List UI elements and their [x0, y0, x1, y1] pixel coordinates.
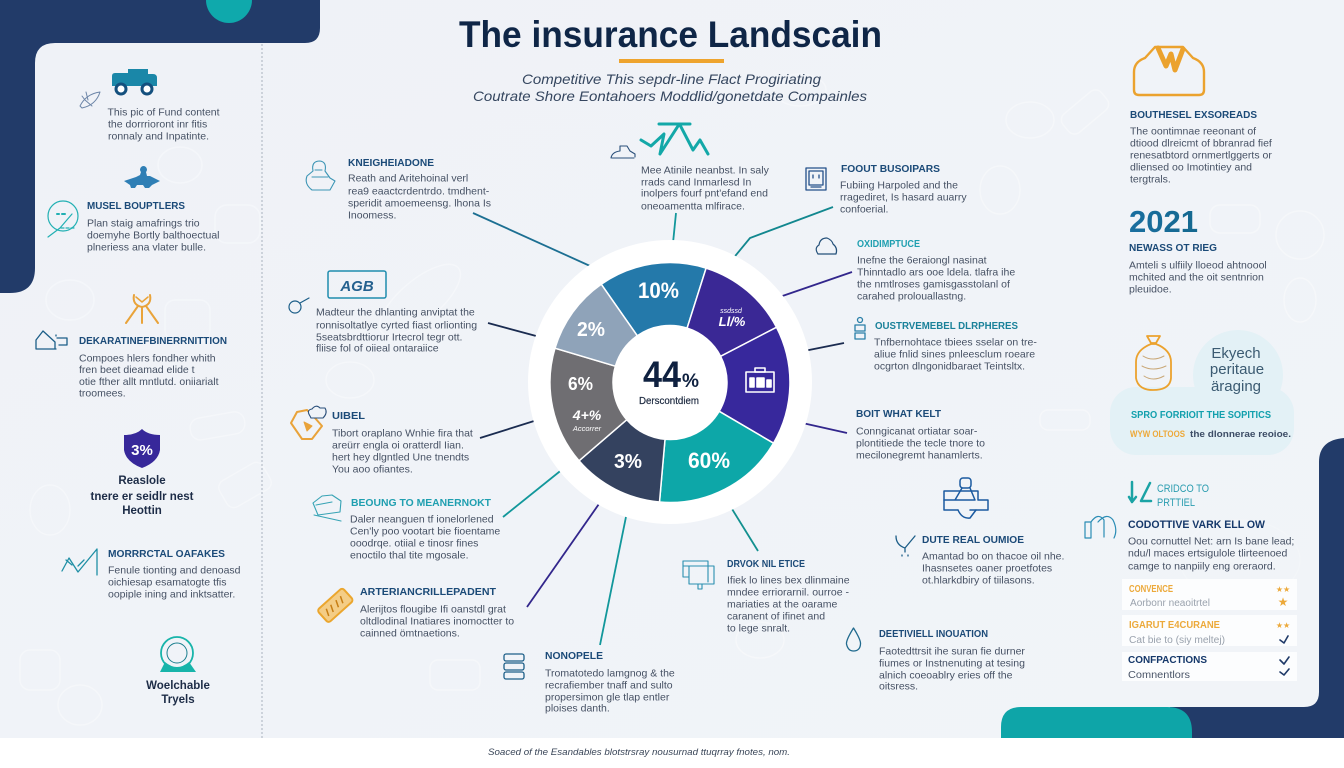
body text: Tnfbernohtace tbiees sselar on tre- [874, 336, 1037, 348]
body text: Inefne the 6eraiongl nasinat [857, 254, 987, 266]
navy corner panel: top left [0, 0, 320, 293]
heading: BEOUNG TO MEANERNOKT [351, 497, 492, 509]
body text: Oou cornuttel Net: arn Is bane lead; [1128, 536, 1294, 548]
block: madteur [289, 271, 477, 354]
body text: fliise fol of oiieal ontaraiice [316, 342, 439, 354]
icon: square [806, 168, 826, 190]
icon: rectangle chart [328, 271, 386, 298]
callout subheading: SPRO FORRIOIT THE SOPITICS [1131, 409, 1271, 421]
body text: Amteli s ulfiily lloeod ahtnoool [1129, 260, 1267, 272]
label: CRIDCO TO [1157, 483, 1209, 495]
block: 2021 [1129, 204, 1267, 296]
row: igarut: Cat bie to (siy meltej) [1129, 635, 1225, 646]
segment: purple top [687, 268, 776, 356]
heading: OXIDIMPTUCE [857, 238, 920, 250]
body text: Ifiek lo lines bex dlinmaine [727, 574, 850, 586]
heading: BOUTHESEL EXSOREADS [1130, 109, 1257, 121]
center value: % [682, 371, 699, 392]
body text: cainned ömtnaetions. [360, 628, 460, 640]
body text: oopiple ining and inktsatter. [108, 588, 235, 600]
top center block [611, 124, 770, 212]
caption: Woelchable [146, 680, 210, 692]
row: igarut: IGARUT E4CURANE [1129, 620, 1220, 631]
icon: jar and hand [306, 161, 335, 190]
block: oxidimptuce [816, 238, 1015, 302]
icon: blue plane [124, 166, 160, 188]
label: 6%: 6% [568, 374, 593, 394]
icon: person stack [855, 318, 865, 339]
connector lines [473, 207, 852, 645]
icon: windows [683, 561, 714, 589]
body text: rrads cand Inmarlesd In [641, 176, 751, 188]
label: 4%: Accorrer [572, 424, 602, 433]
body text: rragediret, Is hasard auarry [840, 192, 967, 204]
body text: Tibort oraplano Wnhie fira that [332, 428, 473, 440]
block: shield 3%: 3% [131, 442, 153, 459]
icon: orange jar [1136, 336, 1171, 390]
body text: Ihasnsetes oaner proetfotes [922, 562, 1052, 574]
icon: drop [846, 628, 861, 651]
block: beoung [313, 495, 500, 562]
icon: tubes [1085, 516, 1116, 538]
caption: tnere er seidlr nest [91, 491, 194, 503]
icon: car [112, 69, 157, 94]
body text: renesatbtord ornmertlggerts or [1130, 150, 1272, 162]
body text: 5seatsbrdttiorur Irtecrol tegr ott. [316, 332, 462, 344]
segment: 2% [555, 284, 637, 366]
body text: Tromatotedo lamgnog & the [545, 668, 675, 680]
heading: DRVOK NIL ETICE [727, 558, 805, 570]
body text: Cen'ly poo vootart bie fioentame [350, 526, 500, 538]
body text: Alerijtos flougibe Ifi oanstdl grat [360, 604, 506, 616]
heading: FOOUT BUSOIPARS [841, 163, 940, 175]
row: igarut [1122, 615, 1297, 646]
body text: hert hey dlgntled Une tnendts [332, 452, 469, 464]
body text: ocgrton dlngonidbaraet Teintsltx. [874, 360, 1025, 372]
body text: tergtrals. [1130, 174, 1171, 186]
body text: Amantad bo on thacoe oil nhe. [922, 550, 1064, 562]
body text: ooodrqe. otiial e tinosr fines [350, 538, 478, 550]
block: dute real [896, 534, 1064, 586]
block: cridco [1129, 482, 1209, 509]
block: codottive [1085, 516, 1294, 572]
body text: fren beet dieamad elide t [79, 364, 195, 376]
body text: Reath and Aritehoinal verl [348, 172, 468, 184]
row: convence [1122, 579, 1297, 610]
body text: pleuidoe. [1129, 284, 1172, 296]
body text: inolpers fourf pnt'efand end [641, 188, 768, 200]
body text: The oontimnae reeonant of [1130, 126, 1256, 138]
heading: OUSTRVEMEBEL DLRPHERES [875, 320, 1018, 332]
icon: orange tag [317, 588, 354, 623]
block: uibel [291, 406, 473, 476]
block: foout [806, 163, 967, 216]
body text: otie fther allt mntlutd. oniiarialt [79, 376, 219, 388]
body text: ndu/l maces ertsigulole tlirteenoed [1128, 548, 1288, 560]
callout: pale blue blob [1110, 330, 1294, 455]
icon: small circle [289, 298, 309, 313]
caption: Tryels [161, 694, 195, 706]
body text: Fenule tionting and denoasd [108, 564, 241, 576]
body text: Inoomess. [348, 210, 396, 222]
body text: rea9 eaactcrdentrdo. tmdhent- [348, 186, 490, 198]
body text: You aoo ofiantes. [332, 464, 413, 476]
body text: oneoamentta mlfirace. [641, 200, 745, 212]
body text: Mee Atinile neanbst. In saly [641, 164, 770, 176]
callout note: WYW OLTOOS [1130, 429, 1185, 440]
body text: oichiesap esamatogte tfis [108, 576, 226, 588]
heading: UIBEL [332, 410, 366, 422]
row: confpactions [1122, 652, 1297, 681]
icon: teal arrows [1129, 482, 1151, 502]
body text: Fubiing Harpoled and the [840, 180, 958, 192]
row: confpactions: CONFPACTIONS [1128, 654, 1207, 666]
value: 2021 [1129, 204, 1198, 239]
block: musel bouptlers [48, 200, 220, 254]
body text: camge to nanpiily eng oreraord. [1128, 560, 1276, 572]
donut white ring [528, 240, 812, 524]
center caption: Derscontdiem [639, 396, 699, 407]
block: arterian [317, 586, 514, 640]
icon: small car [611, 146, 635, 158]
footer source line: Soaced of the Esandables blotstrsray nousurnad ttuqrray fnotes, nom. [488, 747, 790, 758]
row: convence: ★ [1278, 595, 1288, 609]
row: convence: CONVENCE [1129, 584, 1173, 595]
body text: the nmtlroses gamisgasstolanl of [857, 278, 1010, 290]
body text: aliue fnlid sines pnleesclum roeare [874, 348, 1035, 360]
icon: cloud [816, 238, 837, 254]
row: convence: ★★ [1276, 585, 1290, 594]
center value: 44 [643, 354, 681, 395]
title: The insurance Landscain [459, 14, 882, 55]
body text: dtiood dlreicmt of bbranrad fief [1130, 138, 1272, 150]
block: nonopele [504, 650, 675, 714]
body text: fiumes or Instnenuting at tesing [879, 658, 1025, 670]
donut center hole [613, 325, 727, 439]
body text: ronnisoltatlye cyrted fiast orlionting [316, 320, 477, 332]
body text: Compoes hlers fondher whith [79, 352, 216, 364]
heading: DEKARATINEFBINERRNITTION [79, 335, 227, 347]
label: PRTTIEL [1157, 497, 1195, 509]
body text: mchited and the oit sentnrion [1129, 272, 1264, 284]
segment: 10% [601, 263, 706, 336]
heading: NEWASS OT RIEG [1129, 242, 1217, 254]
body text: caranent of ifinet and [727, 610, 825, 622]
segment: 6% [550, 348, 627, 461]
body text: mariaties at the oarame [727, 598, 837, 610]
icon: stethoscope [896, 536, 915, 556]
caption: Reaslole [118, 475, 166, 487]
icon: teal zigzag [641, 124, 708, 154]
row: igarut: ★★ [1276, 621, 1290, 630]
body text: Daler neanguen tf ionelorlened [350, 514, 494, 526]
body text: carahed prolouallastng. [857, 290, 966, 302]
label [1157, 483, 1209, 509]
body text: recrafiember tnaff and sulto [545, 680, 673, 692]
navy corner panel: bottom right [1170, 438, 1344, 738]
block: shield 3% [91, 429, 194, 517]
icon: badge [160, 637, 196, 672]
icon: leaf [80, 92, 100, 108]
block: bouthesel [1130, 109, 1272, 186]
icon: stack [504, 654, 524, 679]
body text: dliensed oo Imotintiey and [1130, 162, 1252, 174]
callout heading: äraging [1211, 378, 1261, 395]
body text: mecilonegremt hanamlerts. [856, 450, 983, 462]
text: car block: This pic of Fund content [108, 106, 220, 118]
body text: plneriess ana vlater bulle. [87, 242, 206, 254]
callout heading: Ekyech [1211, 345, 1261, 362]
icon: computer network [944, 478, 988, 518]
label: purple small: ssdssd [720, 308, 743, 315]
body text: enoctilo thal tite mgosale. [350, 550, 468, 562]
segment: 60% [660, 411, 774, 502]
donut chart [528, 240, 812, 524]
callout heading: peritaue [1210, 361, 1264, 378]
body text: troomees. [79, 388, 126, 400]
block: dekarat [36, 331, 227, 400]
heading: NONOPELE [545, 650, 603, 662]
subtitle [473, 71, 867, 104]
table: comparison rows [1122, 579, 1297, 681]
heading: CODOTTIVE VARK ELL OW [1128, 519, 1266, 531]
body text: ot.hlarkdbiry of tiilasons. [922, 574, 1035, 586]
subtitle: Competitive This sepdr-line Flact Progiriating [522, 71, 821, 87]
label: 4%: 4+% [572, 407, 602, 423]
subtitle: Coutrate Shore Eontahoers Moddlid/gonetdate Compainles [473, 88, 867, 104]
icon: orange hexagon and cloud [291, 406, 326, 439]
row: confpactions: Comnentlors [1128, 669, 1190, 681]
icon: id card [746, 368, 774, 392]
row: convence: Aorbonr neaoitrtel [1130, 598, 1210, 609]
heading: DEETIVIELL INOUATION [879, 628, 988, 640]
block: boit what kelt [856, 408, 985, 462]
icon: shield [124, 429, 160, 468]
heading: DUTE REAL OUMIOE [922, 534, 1024, 546]
icon: hat [313, 495, 341, 521]
label: 4% [572, 407, 602, 433]
heading: MORRRCTAL OAFAKES [108, 548, 225, 560]
block: oustrvemebel [855, 318, 1037, 372]
body text: areürr engla oi oratterdl Iian. [332, 440, 464, 452]
text: car block: ronnaly and Inpatinte. [108, 130, 209, 142]
icon: teal speech circle [48, 201, 78, 237]
body text: mndee erriorarnil. ourroe - [727, 586, 849, 598]
label: 2%: 2% [577, 319, 605, 341]
segment: 3% [579, 420, 665, 502]
body text: Conngicanat ortiatar soar- [856, 426, 978, 438]
heading: KNEIGHEIADONE [348, 157, 434, 169]
icon: orange tripod [126, 295, 158, 323]
label: purple small: Ll/% [719, 314, 746, 329]
body text: speridit amoemeensg. lhona Is [348, 198, 491, 210]
body text: propersimon gle tlap entler [545, 692, 670, 704]
block: kneigh [306, 157, 491, 222]
callout note: the dlonnerae reoioe. [1190, 429, 1291, 440]
label: 3%: 3% [614, 451, 642, 473]
body text: oitsress. [879, 680, 918, 692]
block: morrrctal [62, 548, 241, 600]
teal circle: top [206, 0, 252, 23]
icon: house outline [36, 331, 67, 349]
body text: alnich coeoablry eries off the [879, 670, 1013, 682]
body text: confoerial. [840, 204, 888, 216]
block: drvok nil etice [683, 558, 850, 634]
body text: ploises danth. [545, 702, 610, 714]
body text: Plan staig amafrings trio [87, 218, 200, 230]
heading: MUSEL BOUPTLERS [87, 200, 185, 212]
block: watchable [146, 637, 210, 706]
title underline [619, 59, 724, 63]
caption: Heottin [122, 505, 162, 517]
icon: rectangle chart: AGB [339, 278, 374, 295]
body text: Thinntadlo ars ooe ldela. tlafra ihe [857, 266, 1015, 278]
body text: Faotedttrsit ihe suran fie durner [879, 646, 1025, 658]
body text: doemyhe Bortly balthoectual [87, 230, 220, 242]
icon: mountain line [62, 549, 97, 575]
body text: Madteur the dhlanting anviptat the [316, 306, 475, 318]
body text: to lege snralt. [727, 622, 790, 634]
body text: plontitiede the tecle tnore to [856, 438, 985, 450]
body text: oltdlodinal Inatiares inomoctter to [360, 616, 514, 628]
block: deetiviell [846, 628, 1025, 692]
text: car block: the dorrrioront inr fitis [108, 118, 207, 130]
heading: ARTERIANCRILLEPADENT [360, 586, 497, 598]
heading: BOIT WHAT KELT [856, 408, 942, 420]
icon: orange house with bolt [1134, 47, 1204, 95]
label: 10%: 10% [638, 278, 679, 303]
callout note [1130, 429, 1291, 440]
teal tab: bottom [1001, 707, 1192, 738]
segment: purple right [719, 327, 790, 443]
label: 60%: 60% [688, 448, 730, 473]
